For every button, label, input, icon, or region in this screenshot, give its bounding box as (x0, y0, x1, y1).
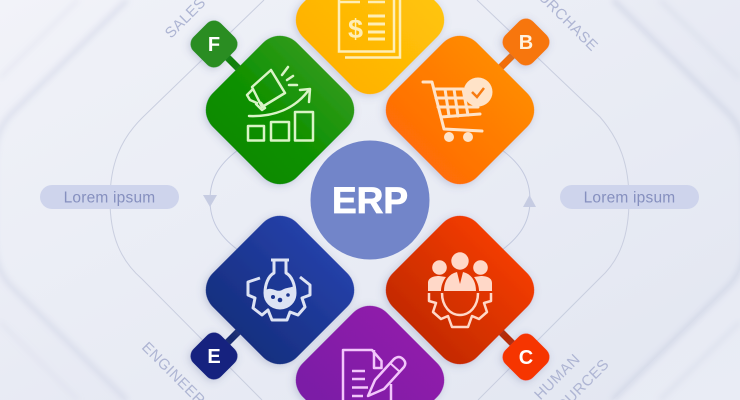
badge F: F (208, 34, 220, 56)
right pill: Lorem ipsum (560, 185, 699, 209)
arrow: right cycle (523, 195, 536, 207)
panel: red human resources (376, 206, 544, 374)
panel: orange purchase (376, 26, 544, 194)
badge F (186, 16, 242, 72)
badge C: C (519, 347, 533, 369)
connector stub E (224, 328, 242, 346)
icon: flask gear (248, 260, 310, 320)
badge B: B (519, 32, 533, 54)
left pill: Lorem ipsum: Lorem ipsum (64, 190, 155, 206)
center circle: ERP (310, 140, 430, 260)
badge E (186, 328, 242, 384)
inner cycle arcs (210, 150, 530, 250)
left pill: Lorem ipsum (40, 185, 179, 209)
panel: yellow finance (286, 0, 454, 104)
icon: shopping cart (423, 78, 492, 142)
arrow: left cycle (203, 195, 217, 207)
right pill: Lorem ipsum: Lorem ipsum (584, 190, 675, 206)
panel: purple documents (286, 296, 454, 400)
badge E: E (207, 346, 221, 368)
connector stub B (498, 52, 516, 70)
outer connector lines (110, 0, 629, 400)
badge B (498, 14, 554, 70)
icon: invoice: $ (348, 14, 363, 44)
icon: invoice (339, 0, 400, 58)
panel: green sales (196, 26, 364, 194)
badge C (498, 329, 554, 385)
connector stub C (498, 329, 516, 347)
icon: people gear (428, 252, 492, 327)
connector stub F (224, 54, 242, 72)
icon: document and pen (343, 350, 405, 400)
center circle: ERP: ERP (332, 180, 408, 221)
panel: blue engineering (196, 206, 364, 374)
icon: megaphone and growth (247, 67, 313, 140)
